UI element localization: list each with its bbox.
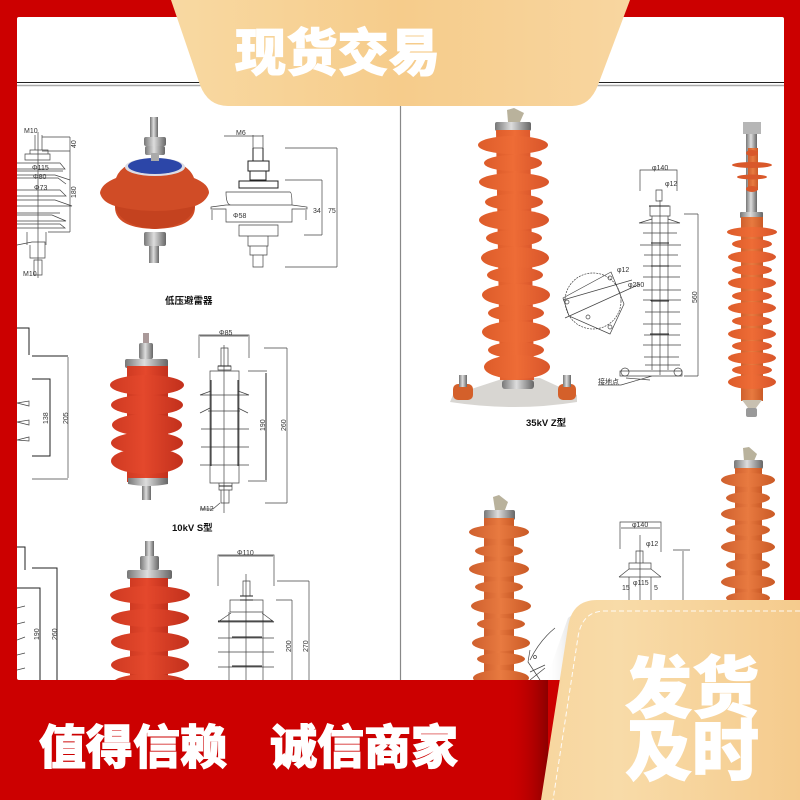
caption: 35kV Z type: 35kV Z型 (526, 417, 567, 429)
product: 10kV S type arrester (110, 333, 184, 500)
dimension drawing: lower left arrester: 270 (303, 640, 310, 652)
card text: on time: 及时 (625, 715, 759, 790)
dimension drawing: 10kV S type: M12 (200, 506, 214, 513)
left edge drawing: top dimensions (17, 128, 78, 278)
dimension drawing: 35kV base plate and body: 接地点 (598, 377, 619, 386)
product: tall arrester upper right (727, 122, 777, 417)
left edge drawing: top dimensions: M10 (24, 128, 38, 135)
dimension drawing: 35kV base plate and body: φ12 (617, 267, 629, 274)
dimension drawing: lower left arrester: Φ110 (237, 550, 254, 557)
caption: 10kV S type: 10kV S型 (172, 522, 213, 534)
dimension drawing: low voltage arrester: M6 (236, 130, 246, 137)
product: arrester lower middle (469, 495, 531, 686)
footer red band shading (505, 680, 548, 800)
left edge drawing: middle dimensions: 138 (43, 412, 50, 424)
left edge drawing: lower dimensions: 260 (52, 628, 59, 640)
left edge drawing: top dimensions: Φ115 (32, 165, 49, 172)
dimension drawing: lower middle: φ140 (632, 522, 648, 529)
fast shipping card (541, 600, 800, 800)
dimension drawing: 35kV base plate and body (563, 165, 699, 386)
dimension drawing: 35kV base plate and body: φ250 (628, 282, 644, 289)
left edge drawing: middle dimensions: 205 (63, 412, 70, 424)
dimension drawing: lower middle: 5 (654, 585, 658, 592)
dimension drawing: low voltage arrester: 75 (328, 208, 336, 215)
left edge drawing: top dimensions: 180 (71, 186, 78, 198)
product: arrester lower left (110, 541, 190, 690)
caption: low voltage arrester: 低压避雷器 (165, 295, 213, 307)
left edge drawing: middle dimensions (17, 328, 70, 479)
dimension drawing: low voltage arrester: Φ58 (233, 213, 246, 220)
left edge drawing: top dimensions: M10 (23, 271, 37, 278)
dimension drawing: lower middle (528, 522, 690, 680)
dimension drawing: 35kV base plate and body: φ12 (665, 181, 677, 188)
page curl shadow (546, 605, 585, 680)
dimension drawing: lower middle: φ12 (646, 541, 658, 548)
slogan: trustworthy: 值得信赖 (39, 721, 227, 774)
dimension drawing: 10kV S type (199, 330, 288, 513)
product: 35kV Z type arrester (450, 108, 577, 407)
dimension drawing: 10kV S type: Φ85 (219, 330, 232, 337)
banner title: 现货交易 (235, 25, 440, 82)
card text: ship: 发货 (625, 652, 759, 727)
slogan: honest merchant: 诚信商家 (270, 721, 458, 774)
left edge drawing: lower dimensions: 190 (34, 628, 41, 640)
dimension drawing: lower middle: φ115 (633, 580, 649, 587)
left edge drawing: lower dimensions (17, 547, 59, 680)
dimension drawing: 10kV S type: 190 (260, 419, 267, 431)
product: low voltage arrester (100, 117, 209, 263)
dimension drawing: 10kV S type: 260 (281, 419, 288, 431)
product: arrester lower right (721, 447, 775, 604)
dimension drawing: lower left arrester: 200 (286, 640, 293, 652)
left edge drawing: top dimensions: Φ73 (34, 185, 47, 192)
footer slogan (39, 721, 458, 774)
dimension drawing: low voltage arrester (211, 130, 337, 267)
top banner (171, 0, 630, 106)
left edge drawing: top dimensions: Φ80 (33, 174, 46, 181)
dimension drawing: low voltage arrester: 34 (313, 208, 321, 215)
dimension drawing: lower left arrester (218, 550, 310, 680)
dimension drawing: 35kV base plate and body: 560 (692, 291, 699, 303)
top right red strip behind banner (784, 0, 800, 600)
dimension drawing: lower middle: 15 (622, 585, 630, 592)
left edge drawing: top dimensions: 40 (71, 140, 78, 148)
dimension drawing: 35kV base plate and body: φ140 (652, 165, 668, 172)
